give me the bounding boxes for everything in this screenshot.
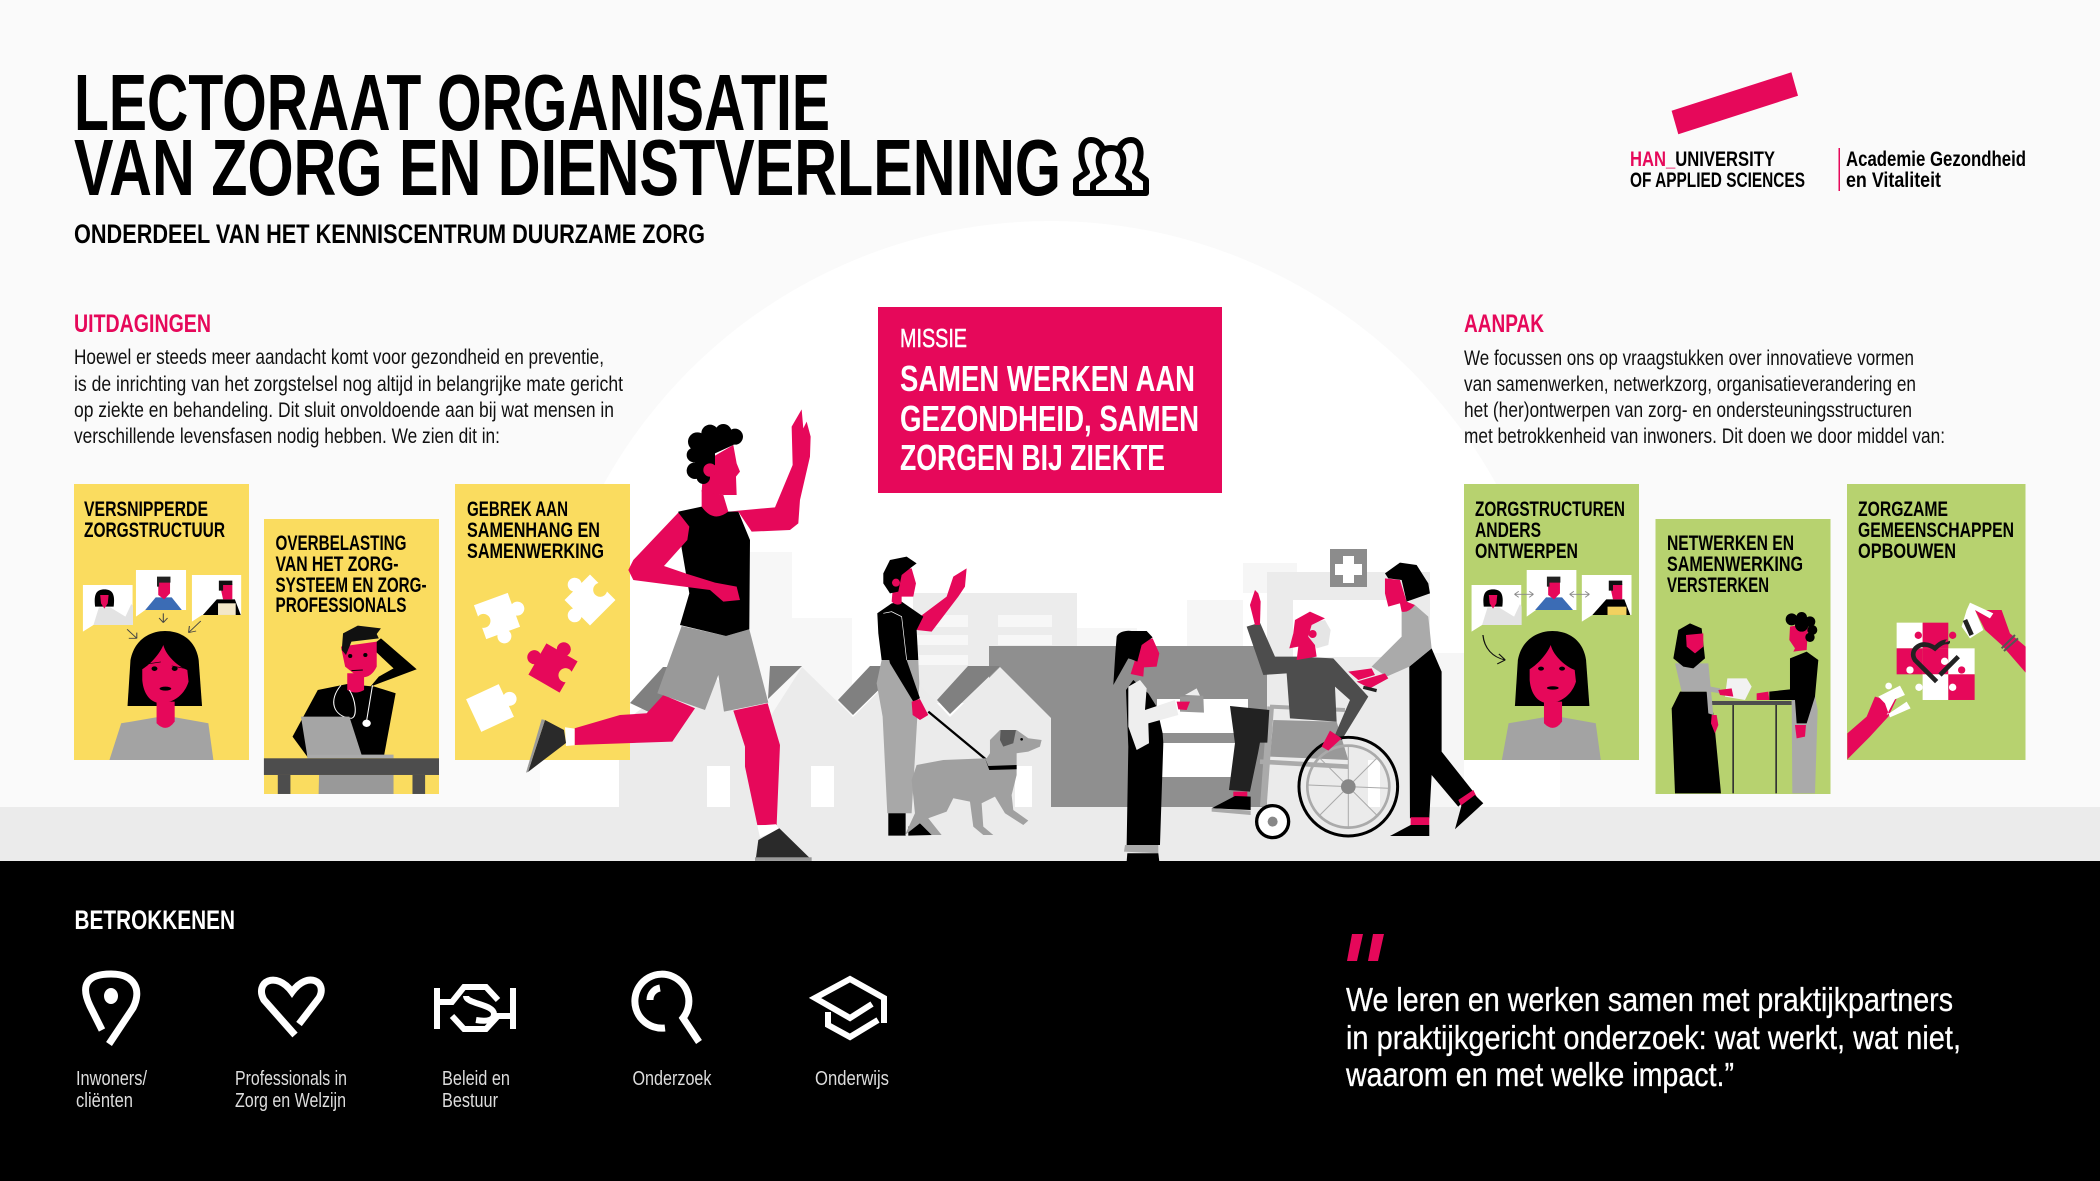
illustration: two people at a table — [1672, 612, 1818, 793]
text block: uitdagingen: is de inrichting van het zorgstelsel nog altijd in belangrijke mate gericht — [74, 373, 623, 396]
stakeholder: inwoners — [76, 974, 147, 1112]
stakeholder: onderwijs — [815, 979, 889, 1090]
text block: uitdagingen — [74, 310, 623, 448]
illustration: nurse pushing wheelchair — [1348, 563, 1483, 836]
quote: in praktijkgericht onderzoek: wat werkt, wat niet, — [1346, 1019, 1961, 1056]
panel: overbelasting: VAN HET ZORG- — [276, 553, 399, 576]
background: city buildings and houses — [600, 552, 1464, 808]
panel: netwerken en samenwerking: NETWERKEN EN — [1667, 532, 1794, 555]
text block: aanpak: het (her)ontwerpen van zorg- en ondersteuningsstructuren — [1464, 399, 1912, 422]
quote — [1345, 981, 1961, 1093]
floor band — [0, 807, 2100, 861]
panel: gebrek aan samenhang: SAMENHANG EN — [467, 519, 600, 542]
panel: overbelasting: SYSTEEM EN ZORG- — [276, 574, 426, 597]
illustration: hands completing a puzzle heart — [1847, 603, 2026, 759]
logo: HAN University of Applied Sciences: Academie Gezondheid — [1846, 148, 2026, 171]
stakeholder: professionals — [235, 980, 347, 1112]
quote: We leren en werken samen met praktijkpartners — [1346, 981, 1953, 1018]
panel: overbelasting — [264, 519, 439, 794]
stakeholder: onderzoek: Onderzoek — [632, 1068, 712, 1090]
illustration: connected caregivers and calm woman — [1472, 570, 1632, 760]
text block: uitdagingen: op ziekte en behandeling. Dit sluit onvoldoende aan bij wat mensen in — [74, 399, 614, 422]
logo: HAN University of Applied Sciences: en Vitaliteit — [1846, 169, 1941, 192]
stakeholder: professionals: Zorg en Welzijn — [235, 1090, 346, 1112]
title: LECTORAAT ORGANISATIE — [74, 58, 830, 147]
dog — [905, 730, 1042, 835]
panel: versnipperde zorgstructuur: ZORGSTRUCTUUR — [84, 519, 225, 542]
wheel — [1257, 737, 1398, 838]
stakeholder: inwoners: Inwoners/ — [76, 1068, 147, 1090]
background: white dome — [540, 221, 1560, 807]
panel: gebrek aan samenhang: SAMENWERKING — [467, 540, 604, 563]
stakeholder: onderzoek — [632, 974, 712, 1090]
panel: zorgzame gemeenschappen opbouwen: ZORGZAME — [1858, 498, 1948, 521]
panel: missie: MISSIE — [900, 323, 967, 353]
leash — [928, 712, 987, 760]
panel: zorgzame gemeenschappen opbouwen: GEMEENSCHAPPEN — [1858, 519, 2014, 542]
text block: aanpak — [1464, 310, 1945, 448]
subtitle: ONDERDEEL VAN HET KENNISCENTRUM DUURZAME ZORG — [74, 219, 705, 249]
icon: magnifier — [635, 974, 699, 1042]
icon: heart — [261, 980, 321, 1035]
panel: missie — [878, 307, 1222, 493]
icon: location pin — [86, 974, 137, 1044]
stakeholder: inwoners: cliënten — [76, 1090, 133, 1112]
panel: zorgstructuren anders ontwerpen: ONTWERPEN — [1475, 540, 1578, 563]
illustration: loose puzzle pieces — [466, 567, 615, 732]
panel: zorgstructuren anders ontwerpen: ANDERS — [1475, 519, 1541, 542]
panel: netwerken en samenwerking: SAMENWERKING — [1667, 553, 1803, 576]
illustration: stressed doctor at laptop — [264, 626, 439, 794]
title: VAN ZORG EN DIENSTVERLENING — [74, 123, 1061, 212]
heading: betrokkenen: BETROKKENEN — [74, 905, 235, 935]
logo: HAN University of Applied Sciences — [1630, 72, 2026, 192]
icon: quotation mark — [1347, 934, 1384, 961]
text block: uitdagingen: Hoewel er steeds meer aandacht komt voor gezondheid en preventie, — [74, 346, 604, 369]
illustration: runner — [526, 409, 812, 861]
panel: overbelasting: PROFESSIONALS — [276, 594, 406, 617]
panel: missie: SAMEN WERKEN AAN — [900, 358, 1195, 399]
panel: zorgstructuren anders ontwerpen: ZORGSTRUCTUREN — [1475, 498, 1625, 521]
text block: uitdagingen: UITDAGINGEN — [74, 310, 211, 338]
stakeholder: professionals: Professionals in — [235, 1068, 347, 1090]
logo: HAN University of Applied Sciences: HAN_UNIVERSITY — [1630, 148, 1775, 171]
panel: zorgstructuren anders ontwerpen — [1464, 484, 1639, 760]
text block: uitdagingen: verschillende levensfasen nodig hebben. We zien dit in: — [74, 425, 500, 448]
panel: overbelasting: OVERBELASTING — [276, 532, 406, 555]
illustration: three caregivers and confused woman — [83, 570, 241, 760]
text block: aanpak: We focussen ons op vraagstukken over innovatieve vormen — [1464, 347, 1914, 370]
panel: gebrek aan samenhang: GEBREK AAN — [467, 498, 568, 521]
icon: group of people — [1076, 140, 1146, 193]
panel: versnipperde zorgstructuur: VERSNIPPERDE — [84, 498, 208, 521]
text block: aanpak: van samenwerken, netwerkzorg, organisatieverandering en — [1464, 373, 1916, 396]
panel: netwerken en samenwerking: VERSTERKEN — [1667, 574, 1769, 597]
stakeholder: beleid en bestuur: Beleid en — [442, 1068, 510, 1090]
panel: netwerken en samenwerking — [1656, 519, 1830, 794]
text block: aanpak: AANPAK — [1464, 310, 1544, 338]
stakeholder: beleid en bestuur: Bestuur — [442, 1090, 498, 1112]
panel: zorgzame gemeenschappen opbouwen: OPBOUWEN — [1858, 540, 1956, 563]
logo: HAN University of Applied Sciences: OF APPLIED SCIENCES — [1630, 169, 1805, 192]
man — [877, 557, 967, 836]
panel: missie: GEZONDHEID, SAMEN — [900, 398, 1199, 439]
black footer band — [0, 861, 2100, 1181]
icon: graduation cap — [815, 979, 884, 1037]
illustration: man walking dog — [877, 557, 1042, 836]
illustration: man in wheelchair — [1212, 590, 1398, 838]
stakeholder: onderwijs: Onderwijs — [815, 1068, 889, 1090]
panel: gebrek aan samenhang — [455, 484, 630, 760]
panel: versnipperde zorgstructuur — [74, 484, 249, 760]
quote: waarom en met welke impact.” — [1345, 1056, 1734, 1093]
panel: missie: ZORGEN BIJ ZIEKTE — [900, 437, 1165, 478]
hospital sign with cross — [1330, 549, 1367, 587]
stakeholder: beleid en bestuur — [437, 987, 513, 1112]
text block: aanpak: met betrokkenheid van inwoners. Dit doen we door middel van: — [1464, 425, 1945, 448]
icon: handshake — [437, 987, 513, 1029]
title — [74, 58, 1061, 212]
illustration: girl with wallet — [1113, 631, 1204, 862]
panel: zorgzame gemeenschappen opbouwen — [1847, 484, 2026, 760]
